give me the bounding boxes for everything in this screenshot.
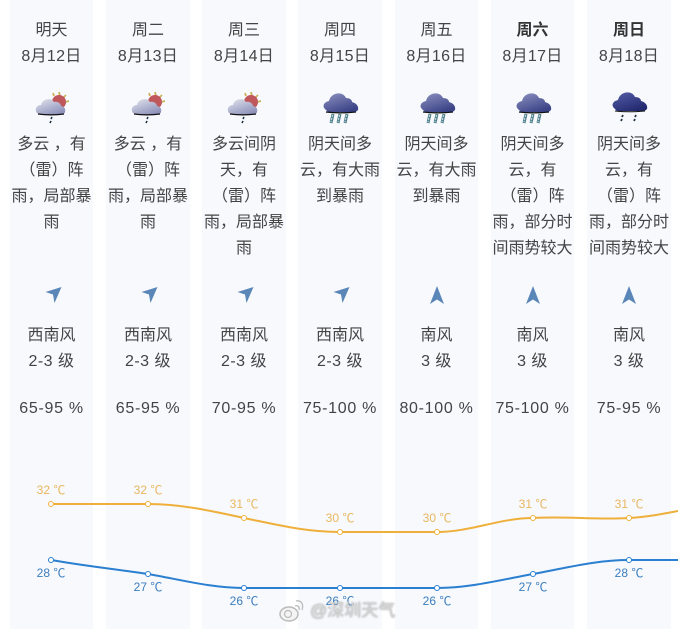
panel: 周日 8月18日 (587, 0, 671, 629)
high temperature line: 30 ℃ (423, 511, 451, 525)
date heading (214, 22, 274, 65)
weather description: 雨，局部暴 (108, 188, 188, 205)
icon: wind direction arrow (622, 286, 636, 304)
low temperature line: 26 ℃ (326, 594, 354, 608)
wind: 西南风 (124, 327, 172, 344)
weather description (108, 135, 188, 231)
wind: 3 级 (421, 353, 452, 370)
weather description: 云，有大雨 (300, 162, 380, 179)
weather description: 多云间阴 (212, 136, 276, 153)
wind: 2-3 级 (125, 353, 171, 370)
icon: dark rain cloud (612, 92, 648, 122)
weather description: 阴天间多 (597, 136, 661, 153)
wind: 3 级 (614, 353, 644, 370)
date heading: 8月18日 (599, 48, 659, 65)
humidity: 75-100 % (495, 400, 570, 417)
high temperature line: 30 ℃ (326, 511, 354, 525)
weather description (204, 135, 284, 257)
weather description: 多云 ，有 (17, 136, 86, 153)
weather description: 雨，部分时 (492, 214, 572, 231)
weather description: 云，有 (605, 162, 653, 179)
weather description (300, 135, 380, 205)
wind (124, 326, 172, 370)
date heading: 周四 (324, 22, 356, 39)
weather description: （雷）阵 (19, 162, 84, 179)
wind (516, 326, 548, 370)
date heading: 8月17日 (502, 48, 563, 65)
weather description: 间雨势较大 (589, 240, 669, 257)
icon: wind direction arrow (334, 287, 350, 303)
weather description: 雨，局部暴 (204, 214, 284, 231)
weather description: 阴天间多 (404, 136, 468, 153)
weather description: 雨，部分时 (589, 214, 669, 231)
panel: 周四 8月15日 (298, 0, 382, 629)
high temperature line (37, 483, 678, 534)
wind: 南风 (613, 327, 645, 344)
weather description (589, 135, 669, 257)
weather description: 云，有 (508, 162, 556, 179)
date heading: 周二 (132, 22, 164, 39)
weather description: 雨 (140, 214, 156, 231)
weather description: 雨，局部暴 (11, 188, 92, 205)
wind: 2-3 级 (317, 353, 363, 370)
wind: 南风 (516, 327, 548, 344)
low temperature line: 27 ℃ (519, 580, 547, 594)
weather description: 到暴雨 (412, 188, 460, 205)
humidity: 65-95 % (19, 400, 84, 417)
date heading: 明天 (35, 22, 68, 39)
panel: 周二 8月13日 (106, 0, 190, 629)
humidity: 70-95 % (212, 400, 276, 417)
weather description: （雷）阵 (597, 188, 661, 205)
date heading (21, 22, 82, 65)
weather description: 多云 ，有 (114, 136, 182, 153)
weather description: 雨 (43, 214, 60, 231)
icon: weibo logo (279, 600, 304, 622)
icon: wind direction arrow (46, 287, 62, 303)
weather description: 阴天间多 (308, 136, 372, 153)
date heading: 周日 (613, 22, 645, 39)
high temperature line: 31 ℃ (615, 497, 643, 511)
date heading: 8月16日 (406, 48, 467, 65)
icon: wind direction arrow (238, 287, 254, 303)
weather description: 阴天间多 (500, 136, 564, 153)
wind: 2-3 级 (28, 353, 75, 370)
icon: wind direction arrow (430, 286, 444, 304)
date heading (406, 22, 467, 65)
humidity: 75-100 % (303, 400, 377, 417)
low temperature line (37, 558, 678, 608)
weather description: 天，有 (220, 162, 268, 179)
high temperature line: 31 ℃ (230, 497, 258, 511)
weather description: 雨 (236, 240, 252, 257)
date heading (118, 22, 178, 65)
panel: 周三 8月14日 (202, 0, 286, 629)
weather description (492, 135, 572, 257)
date heading: 周三 (228, 22, 260, 39)
wind: 3 级 (517, 353, 548, 370)
wind (316, 326, 364, 370)
date heading: 8月15日 (310, 48, 370, 65)
date heading: 8月14日 (214, 48, 274, 65)
low temperature line: 27 ℃ (134, 580, 162, 594)
weather description: （雷）阵 (116, 162, 180, 179)
watermark text: @深圳天气 (310, 601, 395, 620)
low temperature line: 28 ℃ (37, 566, 65, 580)
wind (420, 326, 452, 370)
date heading (599, 22, 659, 65)
wind: 西南风 (316, 327, 364, 344)
icon: partly cloudy with showers (36, 92, 70, 124)
icon: heavy rain cloud (420, 93, 456, 124)
wind: 西南风 (220, 327, 268, 344)
icon: wind direction arrow (526, 286, 540, 304)
date heading: 周六 (516, 22, 548, 39)
date heading: 8月13日 (118, 48, 178, 65)
panel: 明天 8月12日 (10, 0, 93, 629)
humidity: 80-100 % (399, 400, 474, 417)
wind (27, 326, 76, 370)
humidity: 75-95 % (597, 400, 661, 417)
icon: heavy rain cloud (516, 93, 552, 124)
date heading (310, 22, 370, 65)
panel: 周五 8月16日 (395, 0, 478, 629)
low temperature line: 26 ℃ (423, 594, 451, 608)
low temperature line: 26 ℃ (230, 594, 258, 608)
wind (220, 326, 268, 370)
watermark: 深圳天气 (279, 600, 396, 622)
wind (613, 326, 645, 370)
humidity: 65-95 % (116, 400, 180, 417)
chart: high and low temperature lines (37, 483, 678, 608)
high temperature line: 31 ℃ (519, 497, 547, 511)
high temperature line: 32 ℃ (134, 483, 162, 497)
date heading (502, 21, 563, 65)
date heading: 8月12日 (21, 48, 82, 65)
weather description: 到暴雨 (316, 188, 364, 205)
low temperature line: 28 ℃ (615, 566, 643, 580)
wind: 西南风 (27, 327, 76, 344)
wind: 南风 (420, 327, 452, 344)
icon: partly cloudy with showers (228, 92, 262, 124)
panel: 周六 8月17日 (491, 0, 574, 629)
icon: wind direction arrow (142, 287, 158, 303)
date heading: 周五 (420, 22, 452, 39)
icon: heavy rain cloud (324, 93, 358, 124)
weather description (11, 135, 92, 231)
weather description (396, 135, 476, 205)
weather description: 云，有大雨 (396, 162, 476, 179)
high temperature line: 32 ℃ (37, 483, 65, 497)
weather description: （雷）阵 (500, 188, 564, 205)
weather description: 间雨势较大 (492, 240, 572, 257)
wind: 2-3 级 (221, 353, 267, 370)
weather description: （雷）阵 (212, 188, 276, 205)
icon: partly cloudy with showers (132, 92, 166, 124)
